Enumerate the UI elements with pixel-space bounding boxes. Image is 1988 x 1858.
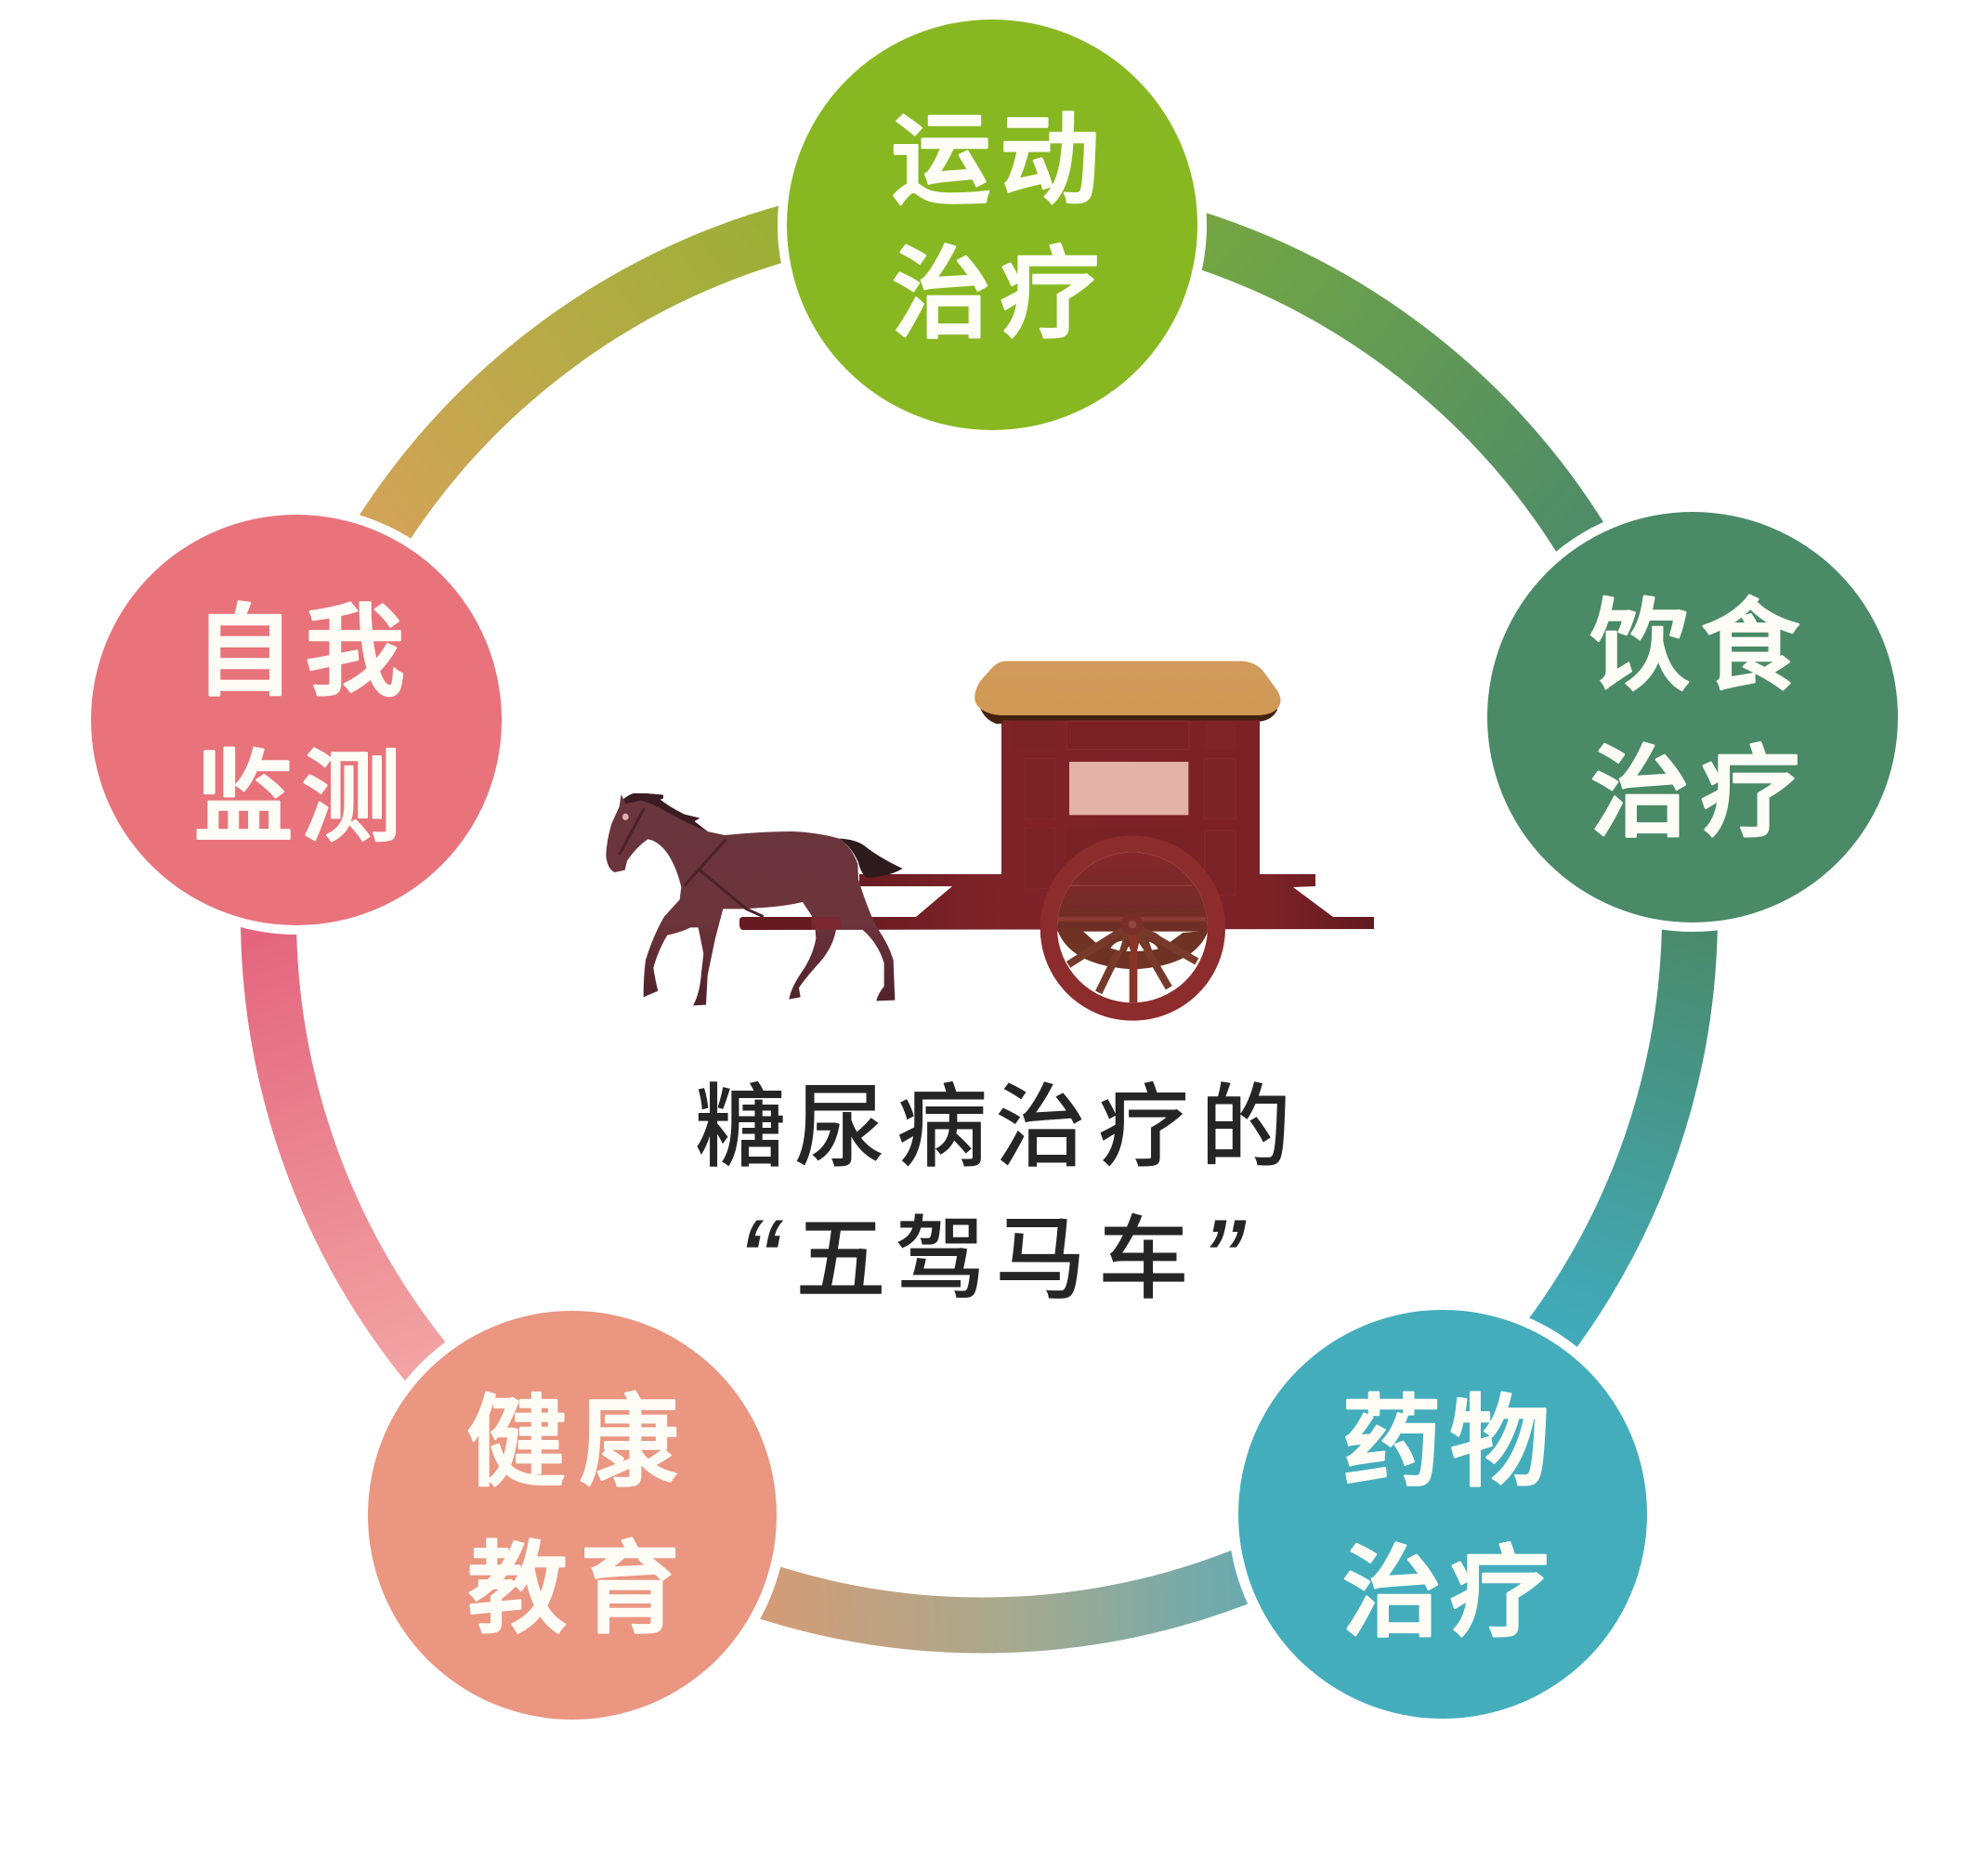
node: 健康教育 <box>358 1301 787 1730</box>
node: 饮食治疗: 饮 <box>1589 590 1690 702</box>
caption line 1: 尿 <box>794 1076 885 1178</box>
caption line 2: 五 <box>795 1208 886 1310</box>
node: 饮食治疗: 食 <box>1700 590 1800 702</box>
node: 运动治疗 <box>778 10 1207 439</box>
caption line 1 <box>695 1076 1291 1178</box>
node: 药物治疗: 药 <box>1341 1386 1442 1498</box>
caption line 1: 治 <box>995 1076 1086 1178</box>
carriage body and shafts <box>739 720 1374 930</box>
node: 药物治疗: 治 <box>1341 1537 1442 1649</box>
node: 运动治疗: 运 <box>891 104 991 216</box>
node: 自我监测: 自 <box>194 595 294 708</box>
node: 药物治疗 <box>1228 1300 1657 1729</box>
illustration: horse and carriage <box>606 661 1374 1021</box>
node: 自我监测: 我 <box>305 595 405 708</box>
node: 药物治疗: 物 <box>1449 1386 1550 1498</box>
caption line 1: 糖 <box>695 1076 786 1178</box>
caption line 2: “ <box>738 1194 783 1329</box>
node: 健康教育: 育 <box>580 1533 680 1645</box>
caption line 2: ” <box>1201 1194 1247 1329</box>
carriage panels <box>1013 721 1236 896</box>
node: 自我监测 <box>82 505 511 935</box>
carriage window <box>1069 762 1188 815</box>
caption line 2: 驾 <box>895 1208 986 1310</box>
arc: diet to medication <box>1546 920 1690 1342</box>
node: 饮食治疗: 疗 <box>1700 737 1800 849</box>
arc: health education to self monitoring <box>268 920 435 1373</box>
node: 药物治疗: 疗 <box>1449 1537 1550 1649</box>
node: 自我监测: 监 <box>193 741 294 854</box>
caption line 2: 马 <box>995 1208 1086 1310</box>
node: 健康教育: 康 <box>579 1386 679 1498</box>
node: 运动治疗: 动 <box>1000 104 1100 216</box>
caption line 2: 车 <box>1098 1208 1189 1310</box>
horse <box>606 793 903 1005</box>
arc: exercise to diet <box>1190 237 1587 548</box>
carriage roof <box>974 661 1281 724</box>
node: 健康教育: 健 <box>466 1386 567 1498</box>
caption line 2 <box>738 1194 1247 1329</box>
caption line 1: 病 <box>896 1076 987 1178</box>
node: 运动治疗: 治 <box>891 238 991 350</box>
node: 健康教育: 教 <box>467 1533 568 1645</box>
node: 运动治疗: 疗 <box>1000 238 1100 350</box>
caption line 1: 的 <box>1200 1076 1291 1178</box>
wheel <box>1040 835 1225 1021</box>
arc: self monitoring to exercise <box>381 230 794 533</box>
node: 饮食治疗 <box>1478 503 1907 932</box>
caption line 1: 疗 <box>1098 1076 1189 1178</box>
node: 饮食治疗: 治 <box>1589 737 1690 849</box>
arc: medication to health education <box>757 1571 1255 1625</box>
node: 自我监测: 测 <box>301 741 401 854</box>
